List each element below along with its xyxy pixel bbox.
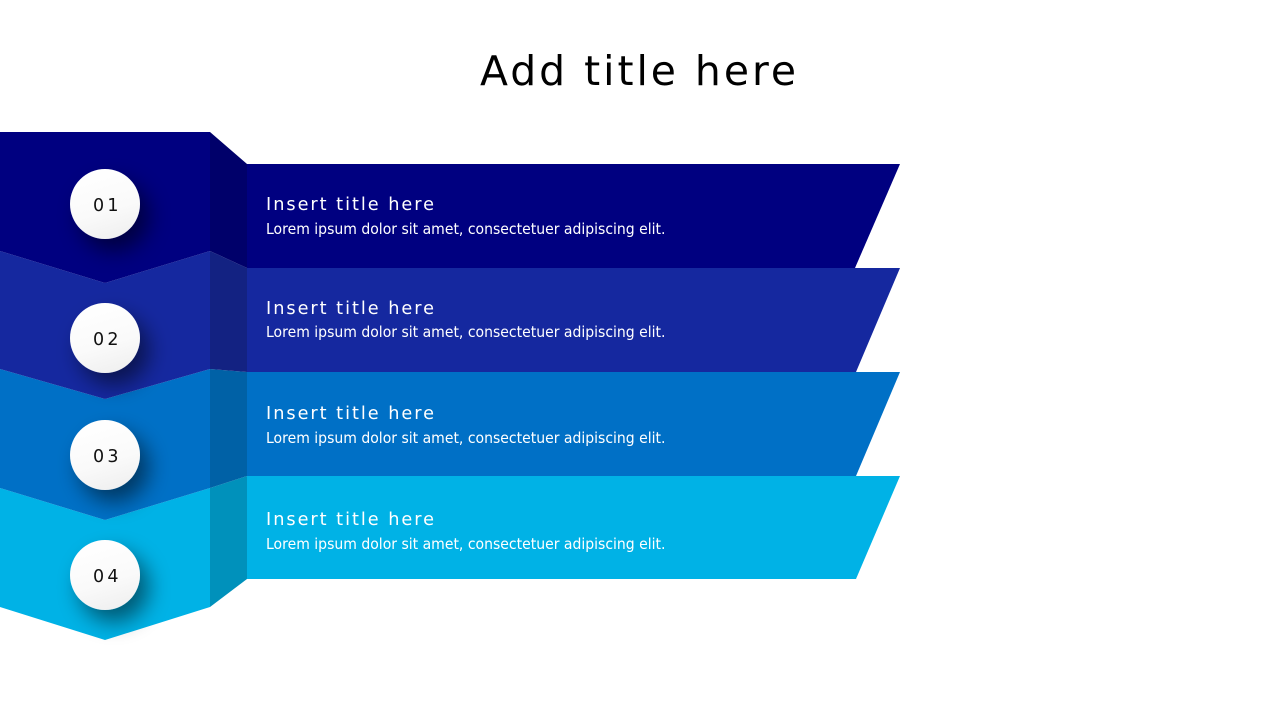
step 03 fold <box>210 369 247 488</box>
step 01 fold <box>210 132 247 268</box>
step 04 body: Lorem ipsum dolor sit amet, consectetuer adipiscing elit. <box>266 535 666 553</box>
step 02 badge: 02 <box>93 330 118 350</box>
step 03 heading: Insert title here <box>266 403 436 424</box>
panel: step 03 <box>0 369 900 520</box>
step 04 fold <box>210 476 247 607</box>
panel: step 02 <box>0 251 900 399</box>
step 01 chevron <box>0 132 210 283</box>
step 01 badge: 01 <box>93 196 118 216</box>
title: Add title here <box>480 47 799 95</box>
step 02 heading: Insert title here <box>266 298 436 319</box>
step 04 heading: Insert title here <box>266 509 436 530</box>
step 04 chevron <box>0 488 210 640</box>
step 04 ribbon <box>247 476 900 579</box>
step 02 ribbon <box>247 268 900 372</box>
step 01 heading: Insert title here <box>266 194 436 215</box>
step 03 chevron <box>0 369 210 520</box>
step 03 ribbon <box>247 372 900 476</box>
step 02 fold <box>210 251 247 372</box>
step 03 body: Lorem ipsum dolor sit amet, consectetuer adipiscing elit. <box>266 429 666 447</box>
step 02 chevron <box>0 251 210 399</box>
step 01 body: Lorem ipsum dolor sit amet, consectetuer adipiscing elit. <box>266 220 666 238</box>
panel: step 04 <box>0 476 900 640</box>
step 01 ribbon <box>247 164 900 268</box>
step 02 badge <box>70 303 140 373</box>
panel: step 01 <box>0 132 900 283</box>
step 03 badge: 03 <box>93 447 118 467</box>
step 02 body: Lorem ipsum dolor sit amet, consectetuer adipiscing elit. <box>266 323 666 341</box>
step 03 badge <box>70 420 140 490</box>
step 04 badge: 04 <box>93 567 118 587</box>
step 04 badge <box>70 540 140 610</box>
step 01 badge <box>70 169 140 239</box>
